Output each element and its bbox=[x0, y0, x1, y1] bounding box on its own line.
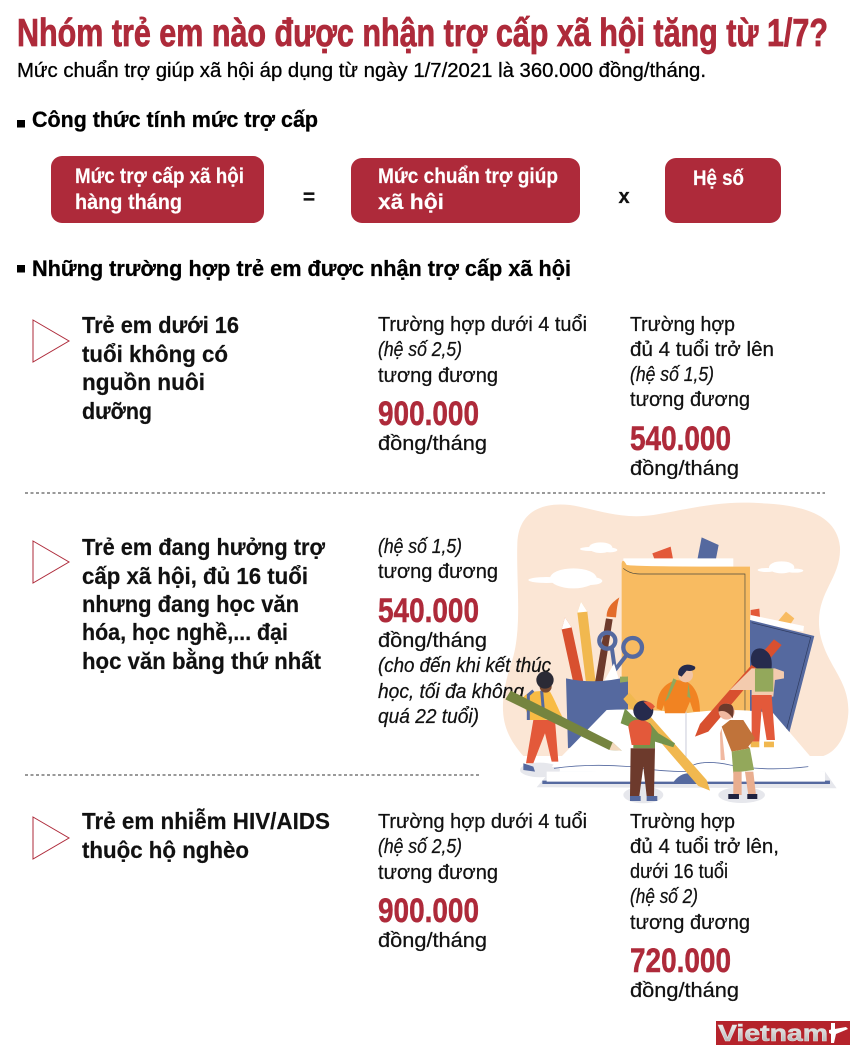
blue back book bbox=[750, 609, 814, 737]
case 2 description: nhưng đang học văn bbox=[82, 591, 299, 617]
formula box: coefficient bbox=[665, 158, 781, 223]
formula box: monthly allowance: Mức trợ cấp xã hội bbox=[75, 165, 244, 188]
case 3 from 4 to under 16 years: 720.000 bbox=[630, 942, 731, 980]
case 3 under 4 years: tương đương bbox=[378, 861, 498, 884]
formula box: standard level: xã hội bbox=[378, 191, 444, 214]
heading: eligible cases: Những trường hợp trẻ em được nhận trợ cấp xã hội bbox=[32, 256, 571, 281]
formula bbox=[51, 156, 781, 223]
case 3 description: Trẻ em nhiễm HIV/AIDS bbox=[82, 807, 330, 834]
case 1 description: Trẻ em dưới 16 bbox=[82, 312, 239, 338]
case 1 under 4 years: tương đương bbox=[378, 364, 498, 387]
case 1 description: tuổi không có bbox=[82, 341, 228, 367]
case 1 under 4 years: (hệ số 2,5) bbox=[378, 338, 462, 361]
case 1 from 4 years: (hệ số 1,5) bbox=[630, 363, 714, 386]
multiply sign: x bbox=[618, 186, 630, 208]
case 3 from 4 to under 16 years: đủ 4 tuổi trở lên, bbox=[630, 835, 779, 858]
case 2 amount: (hệ số 1,5) bbox=[378, 535, 462, 558]
case 2 description: hóa, học nghề,... đại bbox=[82, 619, 288, 645]
case 1 from 4 years bbox=[630, 313, 774, 480]
case 2 description: Trẻ em đang hưởng trợ bbox=[82, 534, 325, 560]
case 2 amount: 540.000 bbox=[378, 592, 479, 630]
child in brown shirt bbox=[718, 704, 757, 799]
child in orange shirt bbox=[657, 665, 700, 713]
formula box: monthly allowance: hàng tháng bbox=[75, 191, 182, 214]
case 1 description: dưỡng bbox=[82, 398, 152, 424]
case 3 under 4 years: (hệ số 2,5) bbox=[378, 835, 462, 858]
case 3 from 4 to under 16 years: dưới 16 tuổi bbox=[630, 860, 728, 883]
icon: triangle arrow bbox=[33, 817, 69, 859]
case 1 from 4 years: tương đương bbox=[630, 388, 750, 411]
case 3 under 4 years: 900.000 bbox=[378, 892, 479, 930]
child with long yellow pencil bbox=[621, 693, 710, 801]
case 1 from 4 years: đủ 4 tuổi trở lên bbox=[630, 338, 774, 361]
child with red pencil and green backpack bbox=[695, 639, 784, 747]
case 1 under 4 years: 900.000 bbox=[378, 395, 479, 433]
logo: Vietnam+ bbox=[716, 1020, 850, 1046]
case 2 amount: tương đương bbox=[378, 560, 498, 583]
formula box: standard level bbox=[351, 158, 580, 223]
case 3 from 4 to under 16 years bbox=[630, 810, 779, 1002]
case 3 from 4 to under 16 years: đồng/tháng bbox=[630, 979, 739, 1002]
case 2 description: cấp xã hội, đủ 16 tuổi bbox=[82, 563, 308, 589]
formula box: standard level: Mức chuẩn trợ giúp bbox=[378, 165, 558, 188]
case 2 amount: (cho đến khi kết thúc bbox=[378, 654, 552, 677]
icon: triangle arrow bbox=[33, 541, 69, 583]
formula box: monthly allowance bbox=[51, 156, 264, 223]
icon: triangle arrow bbox=[33, 320, 69, 362]
equals sign: = bbox=[303, 186, 315, 209]
case 3 from 4 to under 16 years: tương đương bbox=[630, 911, 750, 934]
case 3 under 4 years: Trường hợp dưới 4 tuổi bbox=[378, 810, 587, 833]
case 2 amount: đồng/tháng bbox=[378, 629, 487, 652]
formula box: coefficient: Hệ số bbox=[693, 167, 744, 190]
case 3 from 4 to under 16 years: Trường hợp bbox=[630, 810, 735, 833]
ground shadows bbox=[520, 763, 765, 803]
case 2 amount: quá 22 tuổi) bbox=[378, 705, 479, 728]
case 2 description: học văn bằng thứ nhất bbox=[82, 647, 321, 674]
case 3 from 4 to under 16 years: (hệ số 2) bbox=[630, 885, 698, 908]
case 2 amount bbox=[378, 535, 552, 728]
case 2 bbox=[33, 534, 552, 728]
case 1 under 4 years bbox=[378, 313, 587, 455]
case 1 from 4 years: đồng/tháng bbox=[630, 457, 739, 480]
case 3 under 4 years: đồng/tháng bbox=[378, 929, 487, 952]
pen cup with pencils, brush and scissors bbox=[562, 597, 642, 748]
case 1 from 4 years: Trường hợp bbox=[630, 313, 735, 336]
case 2 amount: học, tối đa không bbox=[378, 680, 525, 703]
case 1 description: nguồn nuôi bbox=[82, 369, 205, 395]
case 3 description: thuộc hộ nghèo bbox=[82, 837, 249, 863]
case 1 bbox=[33, 312, 774, 480]
case 3 bbox=[33, 807, 779, 1002]
illustration background blob bbox=[503, 503, 848, 756]
case 3 under 4 years bbox=[378, 810, 587, 952]
open book bbox=[537, 710, 837, 788]
big yellow book bbox=[622, 537, 750, 713]
case 1 under 4 years: Trường hợp dưới 4 tuổi bbox=[378, 313, 587, 336]
heading: formula: Công thức tính mức trợ cấp bbox=[32, 107, 318, 132]
illustration: children with books and pencils bbox=[505, 537, 837, 803]
case 1 from 4 years: 540.000 bbox=[630, 420, 731, 458]
child with long green pencil bbox=[505, 671, 622, 772]
logo: Vietnam+: Vietnam bbox=[718, 1020, 828, 1046]
subtitle: Mức chuẩn trợ giúp xã hội áp dụng từ ngày 1/7/2021 là 360.000 đồng/tháng. bbox=[17, 60, 706, 82]
case 1 under 4 years: đồng/tháng bbox=[378, 432, 487, 455]
